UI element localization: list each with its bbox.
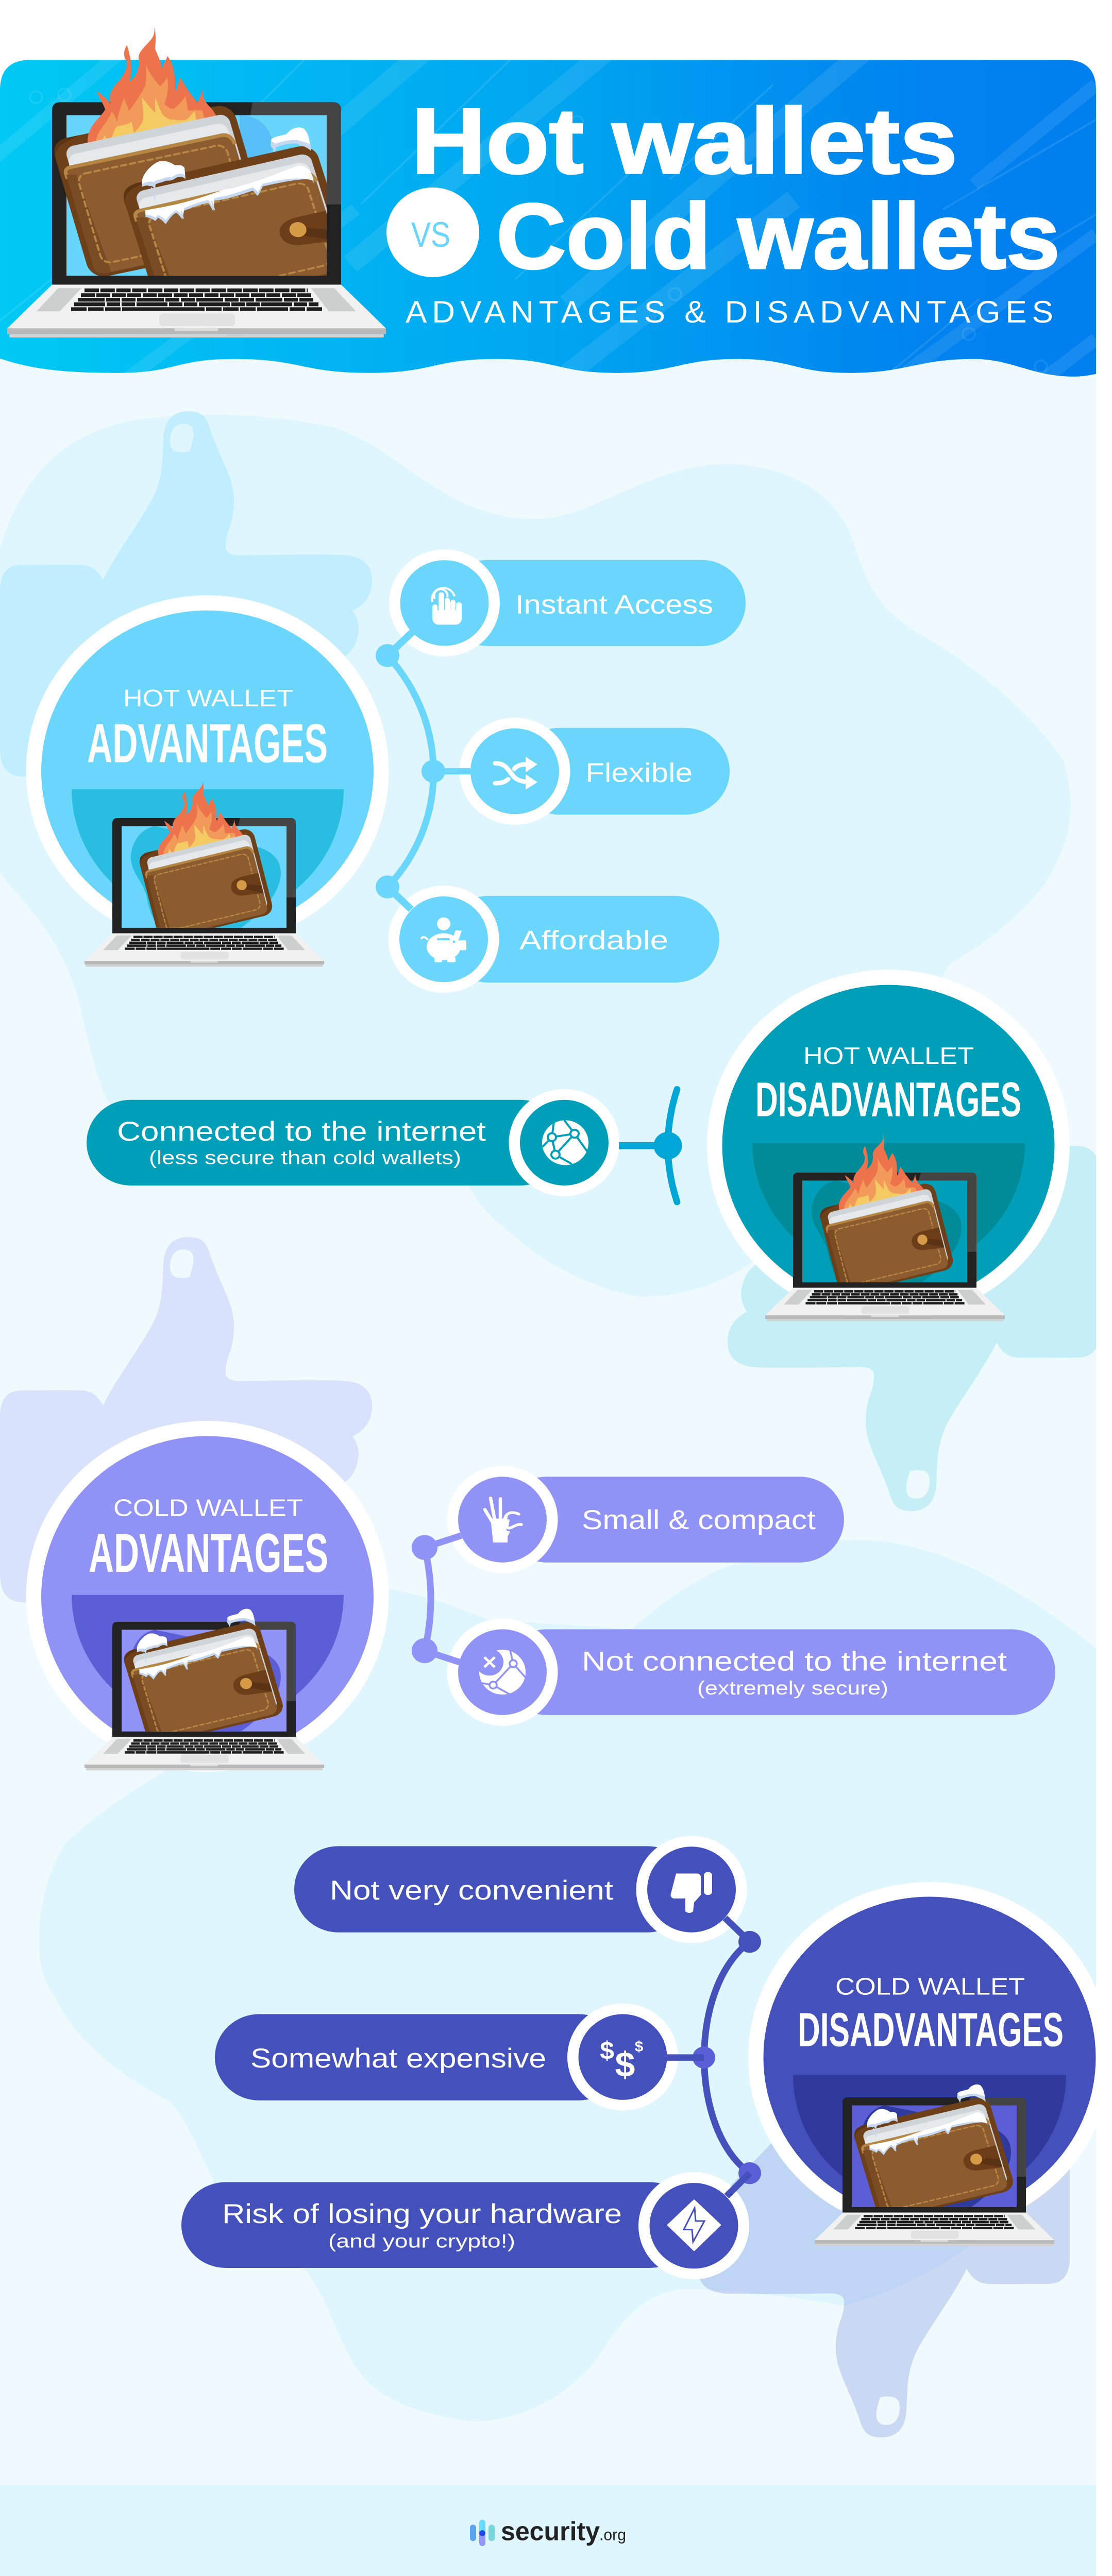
pill: not connected to the internet: (extremely secure) bbox=[697, 1677, 888, 1699]
icon: lightning diamond bbox=[668, 2200, 720, 2250]
panel: hot wallet advantages bbox=[26, 549, 746, 993]
illustration: laptop with burning and frozen wallets bbox=[7, 26, 386, 337]
icon: globe bbox=[542, 1120, 588, 1165]
pill: small and compact bbox=[425, 1466, 844, 1573]
footer band bbox=[0, 2485, 1096, 2576]
wallets bbox=[54, 27, 327, 276]
badge circle: HOT WALLET bbox=[123, 685, 293, 712]
badge circle: ADVANTAGES bbox=[89, 1522, 328, 1584]
pill: somewhat expensive: Somewhat expensive bbox=[250, 2043, 546, 2074]
title bbox=[411, 89, 1060, 288]
panel: hot wallet disadvantages bbox=[87, 970, 1070, 1321]
connector bbox=[376, 644, 445, 899]
laptop with cold wallet bbox=[85, 1609, 324, 1770]
pill: risk of losing your hardware: Risk of losing your hardware bbox=[222, 2199, 622, 2229]
thumb down: hot disadvantages bbox=[728, 1146, 1100, 1511]
connector bbox=[693, 1931, 761, 2184]
vs badge bbox=[386, 188, 479, 277]
laptop with cold wallet bbox=[815, 2084, 1054, 2246]
icon: dollar signs: $ bbox=[600, 2037, 614, 2064]
badge circle bbox=[26, 595, 389, 946]
header banner bbox=[0, 60, 1096, 377]
pill: connected to the internet: Connected to the internet bbox=[117, 1116, 486, 1147]
icon: dollar signs bbox=[600, 2037, 643, 2084]
badge circle bbox=[748, 1882, 1111, 2233]
panel: cold wallet disadvantages bbox=[181, 1836, 1111, 2279]
pill: somewhat expensive bbox=[215, 2004, 704, 2111]
icon: shuffle bbox=[495, 757, 537, 790]
pill: affordable: Affordable bbox=[519, 925, 668, 955]
badge circle: COLD WALLET bbox=[113, 1495, 303, 1522]
logo: security.org bbox=[470, 2517, 626, 2546]
pill: connected to the internet: (less secure than cold wallets) bbox=[149, 1147, 461, 1168]
logo: security.org: security bbox=[501, 2517, 600, 2546]
thumb up: cold advantages bbox=[0, 1237, 372, 1602]
badge circle: HOT WALLET bbox=[803, 1043, 974, 1070]
pill: flexible bbox=[433, 718, 730, 825]
pill: small and compact: Small & compact bbox=[582, 1505, 816, 1535]
laptop with hot wallet bbox=[85, 779, 324, 967]
background blob: cold section bbox=[39, 1540, 1096, 2421]
badge circle: ADVANTAGES bbox=[87, 713, 328, 774]
laptop with hot wallet bbox=[765, 1134, 1005, 1321]
pill: connected to the internet bbox=[87, 1089, 619, 1196]
background blob: hot section bbox=[0, 415, 1071, 1297]
pill: not very convenient bbox=[294, 1836, 750, 1943]
pill: not connected to the internet: Not connected to the internet bbox=[582, 1646, 1007, 1676]
badge circle bbox=[26, 1421, 389, 1772]
icon: piggy bank bbox=[422, 918, 466, 962]
icon: dollar signs: $ bbox=[635, 2038, 643, 2055]
connector bbox=[619, 1089, 682, 1202]
pill: instant access bbox=[387, 549, 746, 656]
title: Hot wallets bbox=[411, 89, 957, 193]
thumb down: cold disadvantages bbox=[698, 2072, 1070, 2437]
icon: thumbs down bbox=[671, 1872, 712, 1913]
icon: disconnected globe bbox=[476, 1649, 526, 1694]
pill: affordable bbox=[387, 886, 719, 993]
panel: cold wallet advantages bbox=[26, 1421, 1055, 1772]
icon: dollar signs: $ bbox=[615, 2045, 635, 2084]
logo: security.org: .org bbox=[599, 2526, 626, 2544]
pill: risk of losing your hardware bbox=[181, 2172, 750, 2279]
icon: pinching hand bbox=[485, 1498, 521, 1543]
subtitle: ADVANTAGES & DISADVANTAGES bbox=[406, 295, 1053, 329]
laptop base bbox=[7, 285, 386, 337]
pill: flexible: Flexible bbox=[585, 758, 693, 788]
icon: touch bbox=[432, 588, 462, 625]
badge circle bbox=[707, 970, 1070, 1320]
pill: instant access: Instant Access bbox=[515, 590, 713, 620]
connector bbox=[412, 1535, 437, 1663]
thumb up: hot advantages bbox=[0, 411, 372, 777]
laptop screen bbox=[52, 102, 341, 285]
title: Cold wallets bbox=[496, 184, 1060, 288]
right margin bbox=[1096, 0, 1112, 2576]
pill: not very convenient: Not very convenient bbox=[330, 1875, 613, 1906]
badge circle: COLD WALLET bbox=[835, 1973, 1025, 2001]
pill: risk of losing your hardware: (and your crypto!) bbox=[328, 2230, 515, 2251]
pill: not connected to the internet bbox=[425, 1619, 1055, 1726]
vs badge: VS bbox=[411, 215, 450, 255]
